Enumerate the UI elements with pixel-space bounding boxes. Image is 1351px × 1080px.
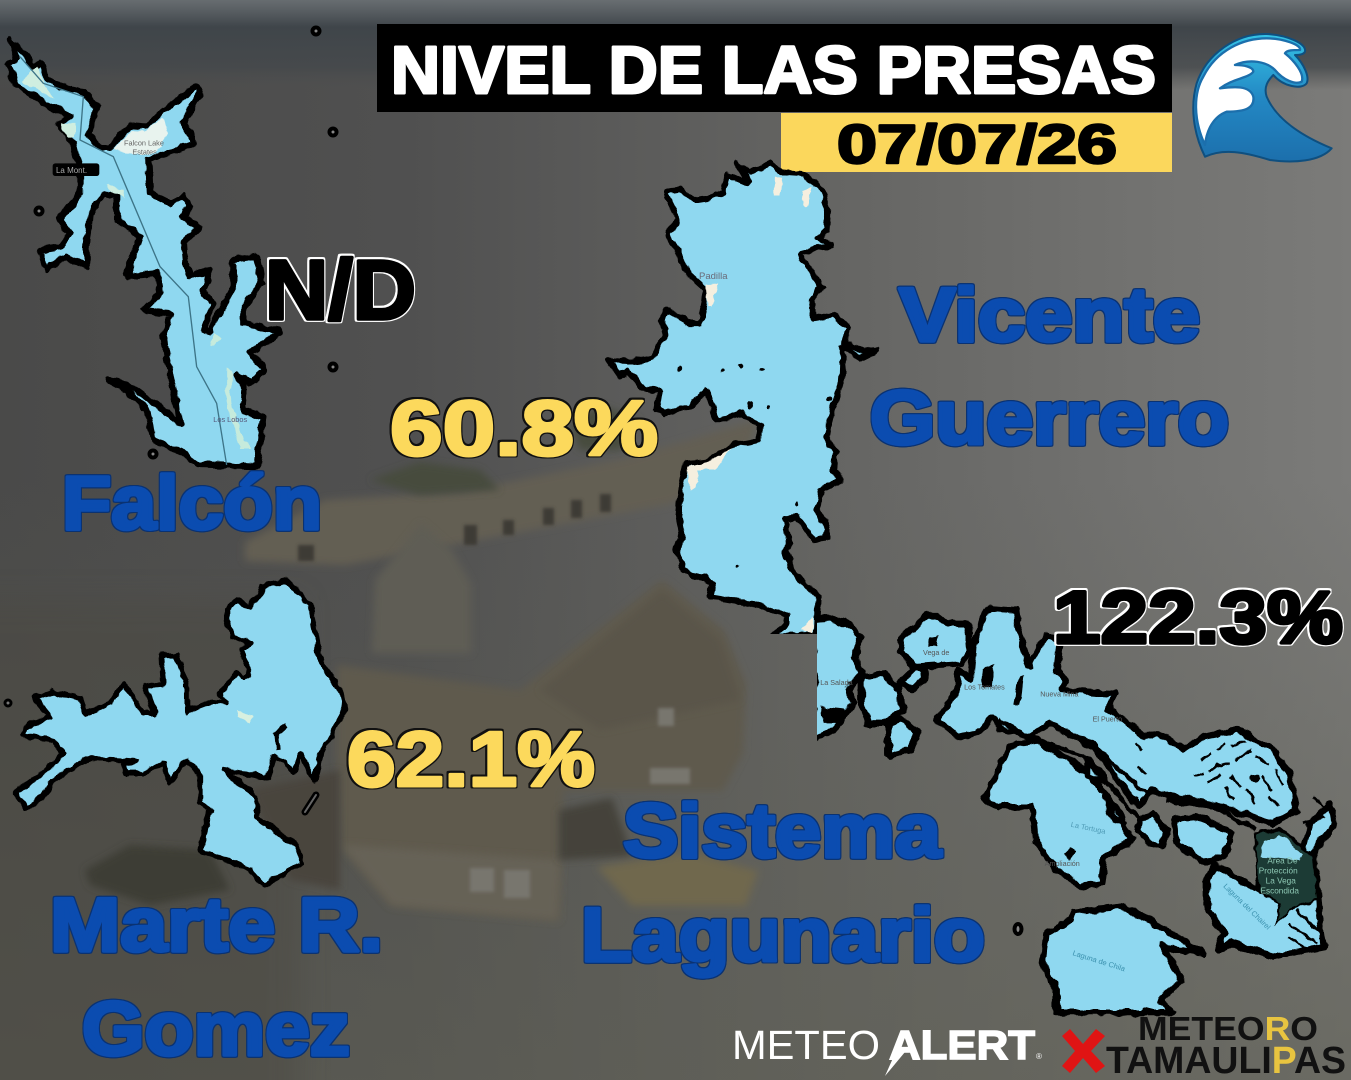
map: Falcón reservoir: Los Lobos bbox=[213, 415, 247, 424]
logo: MeteoAlert: ALERT bbox=[889, 1022, 1035, 1068]
map: Falcón reservoir: Estates bbox=[132, 147, 157, 156]
date banner: 07/07/26 bbox=[837, 113, 1117, 175]
map: lagoon islet bbox=[1014, 924, 1022, 934]
label: Marte R.: Marte R. bbox=[50, 883, 383, 968]
map: Sistema Lagunario lagoons: La Vega bbox=[1266, 876, 1296, 885]
label: Guerrero: Guerrero bbox=[870, 376, 1229, 461]
label: Gomez: Gomez bbox=[82, 987, 350, 1072]
label: 62.1%: 62.1% bbox=[347, 715, 595, 803]
label: 122.3%: 122.3% bbox=[1053, 576, 1343, 659]
map: Vicente Guerrero reservoir bbox=[608, 163, 877, 635]
label: Vicente: Vicente bbox=[899, 273, 1200, 358]
map: Sistema Lagunario lagoons: La Tortuga bbox=[1070, 820, 1107, 836]
map: Sistema Lagunario lagoons: Nueva Mina bbox=[1040, 691, 1079, 699]
label: 60.8%: 60.8% bbox=[390, 384, 658, 472]
map: Sistema Lagunario lagoons: Vega de bbox=[923, 649, 949, 657]
map: Sistema Lagunario lagoons bbox=[813, 608, 1334, 1013]
logo: Meteoro Tamaulipas: METEO RO bbox=[1138, 1010, 1318, 1047]
map: Falcón small islets bbox=[36, 28, 336, 458]
map: Sistema Lagunario lagoons: El Puerto bbox=[1093, 716, 1122, 724]
title banner: NIVEL DE LAS PRESAS bbox=[391, 33, 1156, 108]
label: Falcón: Falcón bbox=[62, 461, 322, 546]
map: Sistema Lagunario lagoons: Escondida bbox=[1261, 886, 1299, 895]
logo: Meteoro Tamaulipas bbox=[1106, 1010, 1346, 1080]
map: Sistema Lagunario lagoons: Ampliación bbox=[1045, 860, 1080, 868]
map: Falcón reservoir: La Mont. bbox=[56, 166, 87, 175]
logo: MeteoAlert bbox=[732, 1022, 1042, 1076]
label: N/D: N/D bbox=[265, 243, 416, 337]
logo: MeteoAlert: METEO bbox=[732, 1022, 880, 1068]
icon: red cross bbox=[1062, 1029, 1105, 1073]
map: Sistema Lagunario lagoons: Protección bbox=[1259, 866, 1298, 875]
date banner bbox=[781, 113, 1172, 175]
map: Sistema Lagunario lagoons: La Salada bbox=[820, 679, 853, 687]
map: Falcón reservoir: Falcon Lake bbox=[124, 139, 164, 148]
icon: wave bbox=[1193, 34, 1332, 161]
map: Vicente Guerrero reservoir: Padilla bbox=[699, 271, 728, 282]
map: Falcón reservoir bbox=[7, 40, 280, 467]
label: Lagunario: Lagunario bbox=[581, 893, 985, 978]
map: Sistema Lagunario lagoons: Laguna del Chairel bbox=[1221, 882, 1273, 932]
logo: MeteoAlert: ® bbox=[1036, 1052, 1042, 1061]
map: Marte R. Gomez reservoir bbox=[5, 580, 345, 885]
map: Sistema Lagunario lagoons: Área De bbox=[1267, 856, 1298, 865]
map: Sistema Lagunario lagoons: Los Tomates bbox=[964, 683, 1005, 691]
label: Sistema: Sistema bbox=[623, 789, 942, 874]
map: Sistema Lagunario lagoons: Laguna de Chila bbox=[1071, 948, 1127, 974]
